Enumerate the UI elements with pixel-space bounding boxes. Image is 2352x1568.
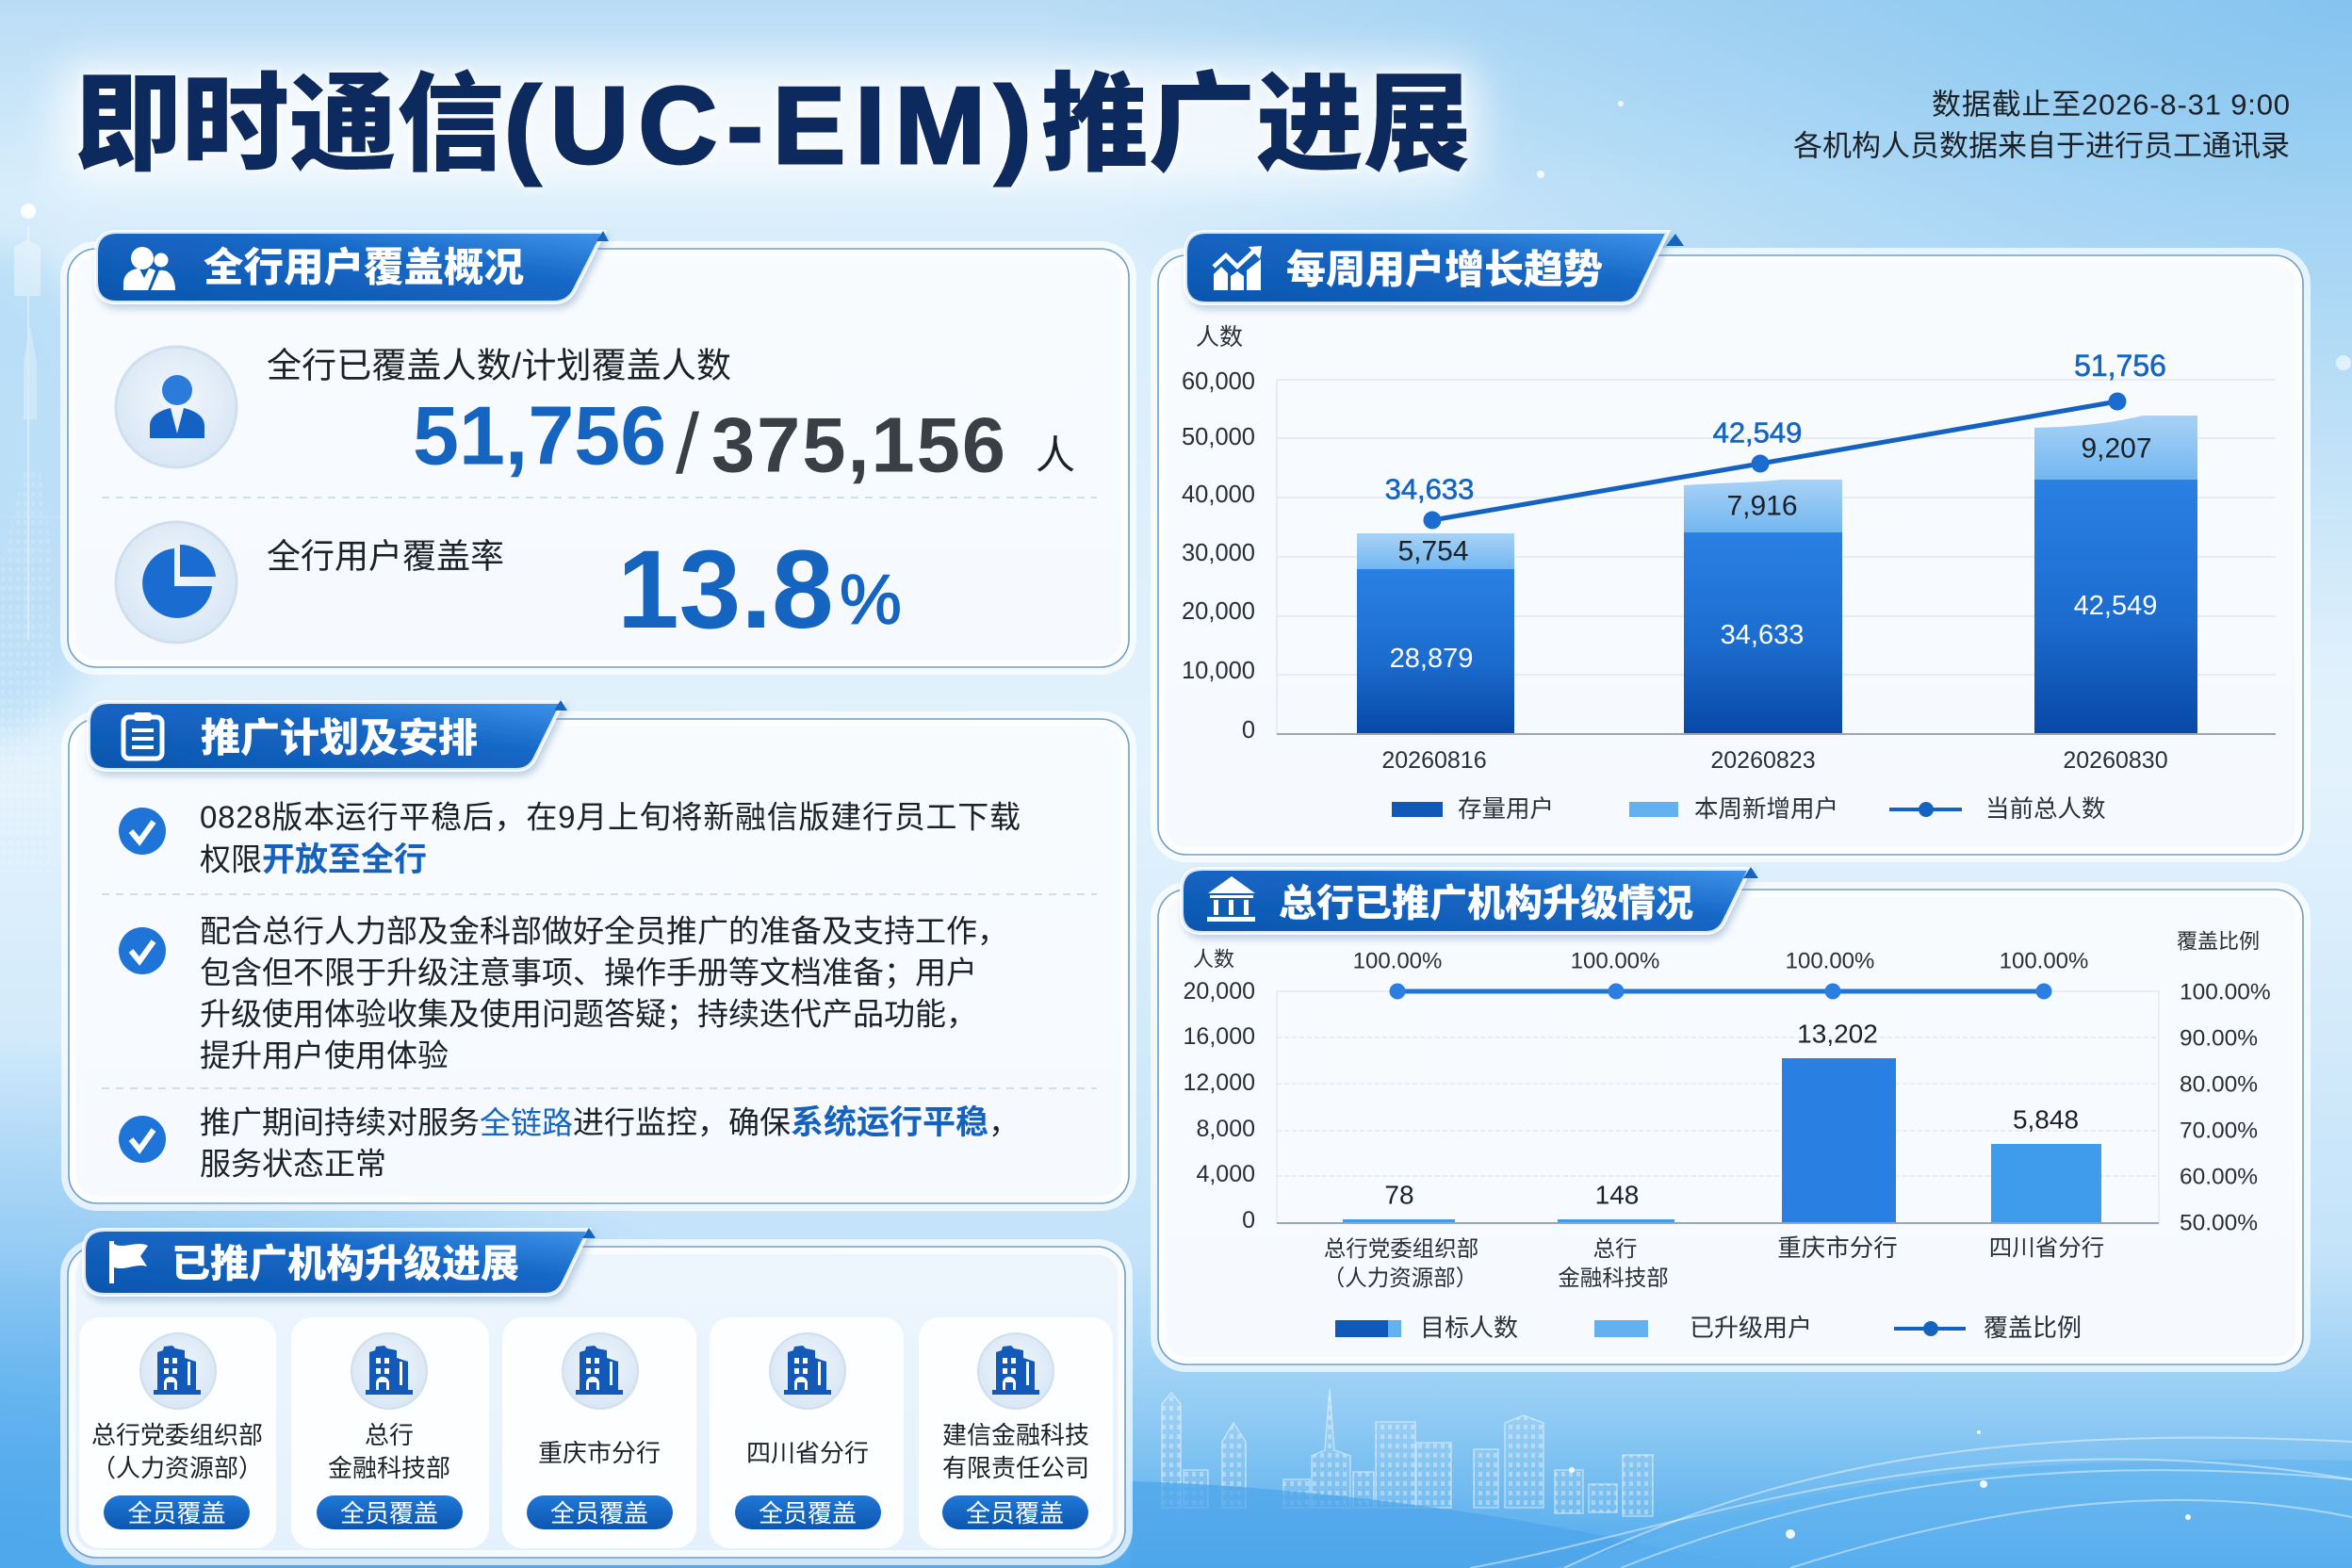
legend	[1335, 1314, 2082, 1342]
bars: 20260830: 9,207	[2081, 433, 2152, 464]
icon: users	[123, 247, 175, 290]
legend	[1392, 796, 2106, 823]
data note: 数据截止至2026-8-31 9:00	[1932, 89, 2290, 121]
panel header: head office institution upgrade	[1182, 867, 1758, 933]
plan item 2	[200, 914, 1008, 1072]
card: party committee org dept	[79, 1317, 276, 1548]
line: current total: 34,633	[1385, 473, 1474, 505]
x axis labels	[1381, 747, 2168, 774]
bars: 20260816: 5,754	[1397, 535, 1469, 567]
icon: check 2	[119, 927, 166, 974]
panel: promoted institutions progress	[68, 1228, 1125, 1558]
panel header: rollout plan: 推广计划及安排	[201, 716, 478, 760]
panel header: head office institution upgrade: 总行已推广机构升级情况	[1279, 883, 1693, 924]
panel: rollout plan	[69, 700, 1129, 1203]
line: current total: 51,756	[2074, 349, 2166, 383]
left axis labels: 4,000	[1196, 1161, 1255, 1187]
legend: 当前总人数	[1985, 796, 2106, 823]
y axis labels: 20,000	[1182, 598, 1255, 625]
y axis labels: 30,000	[1182, 540, 1255, 566]
legend: 本周新增用户	[1694, 796, 1838, 823]
panel header: promoted institutions progress	[84, 1228, 596, 1295]
card: party committee org dept: 全员覆盖	[127, 1499, 226, 1527]
y axis labels: 0	[1242, 717, 1255, 743]
right axis labels: 70.00%	[2180, 1118, 2258, 1144]
card: fintech dept: 全员覆盖	[340, 1499, 438, 1527]
left axis labels	[1184, 978, 1255, 1233]
panel header: overall user coverage	[96, 231, 609, 302]
bars: 13,202	[1797, 1020, 1878, 1048]
icon: bank	[1207, 876, 1255, 922]
icon: check 1	[119, 808, 166, 855]
chart: weekly growth	[1182, 324, 2276, 823]
panel header: weekly user growth: 每周用户增长趋势	[1286, 247, 1603, 292]
coverage rate value: 13.8	[617, 528, 834, 652]
plan item 1: 权限开放至全行	[200, 841, 427, 878]
chart: institution upgrade: 覆盖比例	[2177, 929, 2260, 954]
card: party committee org dept: （人力资源部）	[91, 1454, 263, 1482]
bars: 20260823: 7,916	[1726, 490, 1798, 522]
line: coverage ratio	[1353, 948, 2088, 999]
title: 即时通信(UC-EIM)推广进展	[74, 64, 1471, 187]
card: Sichuan branch: 全员覆盖	[759, 1499, 857, 1527]
line: coverage ratio: 100.00%	[1786, 948, 1874, 974]
chart: institution upgrade	[1184, 929, 2271, 1342]
bars: 5,848	[2013, 1104, 2079, 1135]
icon: flag	[109, 1241, 148, 1283]
icon: pie chart	[116, 522, 237, 643]
plan item 3: 推广期间持续对服务全链路进行监控，确保系统运行平稳，	[200, 1104, 1020, 1140]
category labels: 总行党委组织部	[1324, 1236, 1478, 1261]
card: Sichuan branch	[710, 1317, 904, 1548]
panel header: rollout plan	[89, 700, 567, 770]
plan item 1: 0828版本运行平稳后，在9月上旬将新融信版建行员工下载	[200, 799, 1021, 835]
card: fintech dept	[291, 1317, 489, 1548]
card: CCB Fintech: 有限责任公司	[942, 1454, 1089, 1482]
card: Chongqing branch: 全员覆盖	[550, 1499, 648, 1527]
coverage label: 全行已覆盖人数/计划覆盖人数	[267, 347, 731, 384]
coverage numbers: 375,156	[711, 401, 1007, 488]
panel header: weekly user growth	[1185, 232, 1684, 303]
bars: 148	[1595, 1180, 1639, 1210]
left axis labels: 12,000	[1184, 1070, 1255, 1096]
card: Chongqing branch	[502, 1317, 696, 1548]
bars: 20260823	[1684, 480, 1842, 734]
coverage numbers: 人	[1036, 433, 1075, 477]
line: current total: 42,549	[1713, 416, 1802, 449]
line: coverage ratio: 100.00%	[1571, 948, 1659, 974]
bars: 20260830: 42,549	[2074, 591, 2157, 621]
right axis labels: 60.00%	[2180, 1165, 2258, 1189]
x axis labels: 20260816	[1381, 747, 1487, 774]
line: current total	[1385, 349, 2166, 530]
category labels: （人力资源部）	[1323, 1266, 1478, 1290]
coverage rate label: 全行用户覆盖率	[267, 537, 504, 575]
plan item 2: 配合总行人力部及金科部做好全员推广的准备及支持工作，	[200, 914, 1008, 948]
bars: 20260830	[2034, 416, 2197, 734]
right axis labels: 50.00%	[2180, 1210, 2258, 1236]
coverage numbers: 51,756	[413, 388, 666, 482]
category labels	[1323, 1234, 2104, 1290]
left axis labels: 8,000	[1196, 1116, 1255, 1142]
y axis labels: 10,000	[1182, 658, 1255, 684]
y axis labels: 40,000	[1182, 482, 1255, 508]
right axis labels: 90.00%	[2180, 1025, 2258, 1052]
panel header: promoted institutions progress: 已推广机构升级进展	[172, 1242, 519, 1285]
coverage numbers	[413, 388, 1075, 492]
x axis labels: 20260823	[1710, 747, 1816, 774]
y axis labels: 50,000	[1182, 424, 1255, 450]
category labels: 四川省分行	[1989, 1234, 2104, 1261]
y axis labels	[1182, 368, 1255, 743]
plan item 1	[200, 799, 1021, 878]
card: Sichuan branch: 四川省分行	[746, 1439, 869, 1467]
bars: 78	[1384, 1180, 1414, 1210]
plan item 3: 服务状态正常	[200, 1146, 386, 1182]
right axis labels	[2180, 980, 2271, 1236]
card: CCB Fintech: 全员覆盖	[966, 1499, 1064, 1527]
category labels: 总行	[1592, 1236, 1638, 1261]
card: party committee org dept: 总行党委组织部	[91, 1421, 263, 1449]
chart: institution upgrade: 人数	[1193, 948, 1234, 971]
panel: head office institution upgrade	[1158, 867, 2303, 1364]
legend: 已升级用户	[1690, 1314, 1812, 1342]
category labels: 重庆市分行	[1777, 1235, 1898, 1262]
icon: growth chart	[1214, 246, 1262, 290]
chart: weekly growth: 人数	[1196, 324, 1243, 351]
panel: overall user coverage	[68, 231, 1129, 667]
right axis labels: 80.00%	[2180, 1072, 2258, 1097]
icon: check 3	[119, 1116, 166, 1163]
panel header: overall user coverage: 全行用户覆盖概况	[204, 247, 524, 290]
decorative bottom waves	[1131, 1481, 1790, 1568]
card: CCB Fintech: 建信金融科技	[942, 1421, 1089, 1449]
x axis labels: 20260830	[2063, 747, 2168, 774]
data note: 各机构人员数据来自于进行员工通讯录	[1793, 130, 2290, 162]
bars: 20260816	[1357, 533, 1514, 734]
data note	[1793, 89, 2290, 162]
decorative skyline	[1162, 1389, 1653, 1516]
left axis labels: 20,000	[1184, 978, 1255, 1004]
card: CCB Fintech	[919, 1317, 1113, 1548]
coverage numbers: /	[676, 398, 699, 492]
card: Chongqing branch: 重庆市分行	[538, 1439, 661, 1467]
y axis labels: 60,000	[1182, 368, 1255, 395]
legend: 目标人数	[1420, 1314, 1518, 1342]
card: fintech dept: 总行	[365, 1421, 414, 1449]
bars	[1343, 1020, 2101, 1223]
plan item 3	[200, 1104, 1020, 1182]
panel: weekly user growth	[1158, 232, 2303, 855]
left axis labels: 0	[1242, 1207, 1255, 1233]
decorative left tower	[0, 226, 54, 876]
plan item 2: 包含但不限于升级注意事项、操作手册等文档准备；用户	[200, 956, 977, 989]
plan item 2: 提升用户使用体验	[200, 1038, 449, 1072]
coverage rate value: %	[840, 560, 902, 639]
right axis labels: 100.00%	[2180, 980, 2271, 1004]
bars: 20260823: 34,633	[1721, 620, 1804, 650]
bars: 20260816: 28,879	[1390, 644, 1473, 674]
legend: 存量用户	[1458, 796, 1554, 823]
icon: clipboard	[123, 712, 162, 759]
category labels: 金融科技部	[1558, 1266, 1669, 1290]
line: coverage ratio: 100.00%	[1353, 948, 1442, 974]
left axis labels: 16,000	[1184, 1023, 1255, 1050]
legend: 覆盖比例	[1984, 1314, 2082, 1342]
plan item 2: 升级使用体验收集及使用问题答疑；持续迭代产品功能，	[200, 997, 977, 1031]
card: fintech dept: 金融科技部	[328, 1454, 450, 1482]
icon: person	[116, 347, 237, 467]
line: coverage ratio: 100.00%	[2000, 948, 2088, 974]
